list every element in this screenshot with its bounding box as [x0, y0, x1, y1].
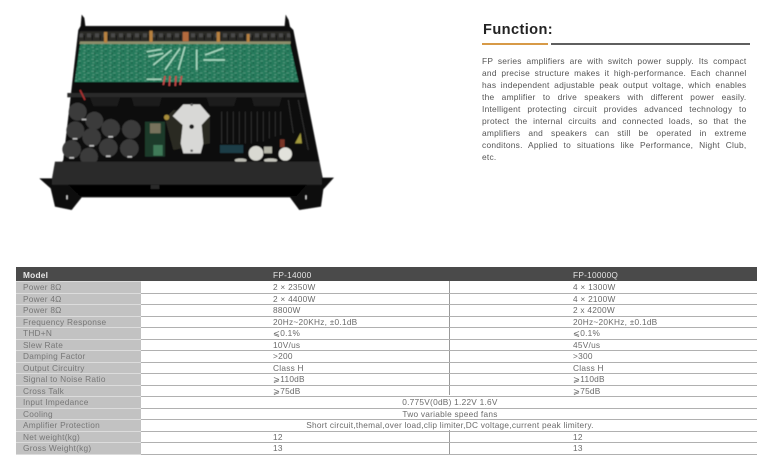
heading underline: grey	[551, 42, 750, 44]
row: Output Circuitry: Output Circuitry	[23, 362, 85, 372]
merged rows mask over divider	[448, 395, 450, 430]
row: Net weight: Net weight(kg)	[23, 432, 80, 442]
row: Frequency Response: 20Hz~20KHz, ±0.1dB	[273, 316, 357, 326]
function paragraph	[482, 56, 746, 162]
row: Power 4 ohm: 2 × 4400W	[273, 294, 316, 304]
product photo: amplifier interior	[39, 14, 334, 211]
row: Damping Factor: Damping Factor	[23, 351, 86, 361]
row: Cross Talk	[16, 384, 757, 397]
row: THD+N: ⩽0.1%	[273, 328, 300, 338]
row: Net weight	[16, 430, 757, 443]
function paragraph: etc.	[482, 152, 496, 162]
row: Slew Rate	[16, 338, 757, 351]
row: Amplifier Protection	[16, 419, 757, 432]
table header row	[16, 266, 757, 281]
row: Net weight: 12	[573, 432, 583, 442]
row: Frequency Response: Frequency Response	[23, 316, 106, 326]
table header row: FP-10000Q	[573, 270, 618, 280]
function paragraph: has independent adjustable peak output voltage, which enables	[482, 80, 746, 90]
capacitors	[62, 103, 141, 166]
row: Input Impedance	[16, 396, 757, 408]
specification table	[16, 267, 757, 455]
row: Cooling	[16, 408, 757, 420]
row: Power 8 ohm: Power 8Ω	[23, 282, 62, 292]
chassis	[39, 15, 334, 210]
row: Power 8 ohm	[16, 281, 757, 294]
row: THD+N: ⩽0.1%	[573, 328, 600, 338]
row: Output Circuitry: Class H	[573, 362, 604, 372]
function paragraph: and precise structure makes it high-performance. Each channel	[482, 68, 746, 78]
row: Damping Factor: >200	[273, 351, 293, 361]
transformer plate	[173, 103, 210, 153]
row: Signal to Noise Ratio: ⩾110dB	[273, 374, 305, 384]
row: Cross Talk: ⩾75dB	[573, 386, 601, 396]
table header row: Model	[23, 270, 48, 280]
row: Gross Weight: 13	[273, 443, 283, 453]
row: Input Impedance: 0.775V(0dB) 1.22V 1.6V	[402, 397, 498, 407]
row: THD+N: THD+N	[23, 328, 52, 338]
heading underline: orange	[482, 42, 548, 44]
row: Power 8 ohm bridged: 8800W	[273, 305, 301, 315]
green circuit board	[75, 44, 299, 86]
label column background	[16, 281, 141, 454]
row: Gross Weight: 13	[573, 443, 583, 453]
row: Power 4 ohm: 4 × 2100W	[573, 294, 616, 304]
row: Signal to Noise Ratio	[16, 373, 757, 386]
row: Amplifier Protection: Amplifier Protection	[23, 420, 100, 430]
function paragraph: FP series amplifiers are with switch power supply. Its compact	[482, 56, 746, 66]
row: Damping Factor: >300	[573, 351, 593, 361]
function paragraph: Intelligent protecting circuit provides advanced technology to	[482, 104, 746, 114]
row: Cooling: Two variable speed fans	[402, 408, 498, 418]
row: Slew Rate: 10V/us	[273, 340, 300, 350]
row: Gross Weight	[16, 442, 757, 454]
table header row: FP-14000	[273, 270, 311, 280]
row: Power 8 ohm bridged: 2 x 4200W	[573, 305, 615, 315]
row: Frequency Response: 20Hz~20KHz, ±0.1dB	[573, 316, 657, 326]
fan bar	[67, 90, 305, 106]
row: Cross Talk: ⩾75dB	[273, 386, 301, 396]
row: Output Circuitry	[16, 362, 757, 374]
row: Slew Rate: Slew Rate	[23, 340, 63, 350]
row: Cross Talk: Cross Talk	[23, 386, 64, 396]
row: Amplifier Protection: Short circuit,themal,over load,clip limiter,DC voltage,current peak limitery.	[306, 420, 594, 430]
row: Power 8 ohm: 4 × 1300W	[573, 282, 616, 292]
small board and white capacitors	[220, 133, 302, 162]
row: Power 4 ohm: Power 4Ω	[23, 294, 62, 304]
heading: Function: Function:	[483, 22, 553, 38]
row: Power 8 ohm bridged	[16, 304, 757, 316]
function paragraph: amplifiers and speakers can still be operated in extreme	[482, 128, 746, 138]
row: Net weight: 12	[273, 432, 283, 442]
row: Slew Rate: 45V/us	[573, 340, 600, 350]
row: Power 8 ohm: 2 × 2350W	[273, 282, 316, 292]
row: Frequency Response	[16, 316, 757, 328]
capacitor highlights	[69, 119, 132, 159]
row: Power 4 ohm	[16, 292, 757, 305]
rear connector strip	[79, 31, 291, 44]
row: Input Impedance: Input Impedance	[23, 397, 89, 407]
power supply board	[145, 110, 210, 157]
function paragraph: protect the internal circuits and connected loads, so that the	[482, 116, 746, 126]
row: Signal to Noise Ratio: Signal to Noise Ratio	[23, 374, 106, 384]
row: Power 8 ohm bridged: Power 8Ω	[23, 305, 62, 315]
front panel	[52, 162, 322, 199]
row: Output Circuitry: Class H	[273, 362, 304, 372]
row: Gross Weight: Gross Weight(kg)	[23, 443, 91, 453]
row: THD+N	[16, 327, 757, 340]
row: Signal to Noise Ratio: ⩾110dB	[573, 374, 605, 384]
column divider	[448, 281, 450, 454]
function paragraph: conditons. Applied to situations like Performance, Night Club,	[482, 140, 746, 150]
function paragraph: the amplifier to drive speakers with different power easily.	[482, 92, 746, 102]
row: Cooling: Cooling	[23, 408, 53, 418]
heat sink fins	[222, 100, 308, 150]
row: Damping Factor	[16, 350, 757, 362]
